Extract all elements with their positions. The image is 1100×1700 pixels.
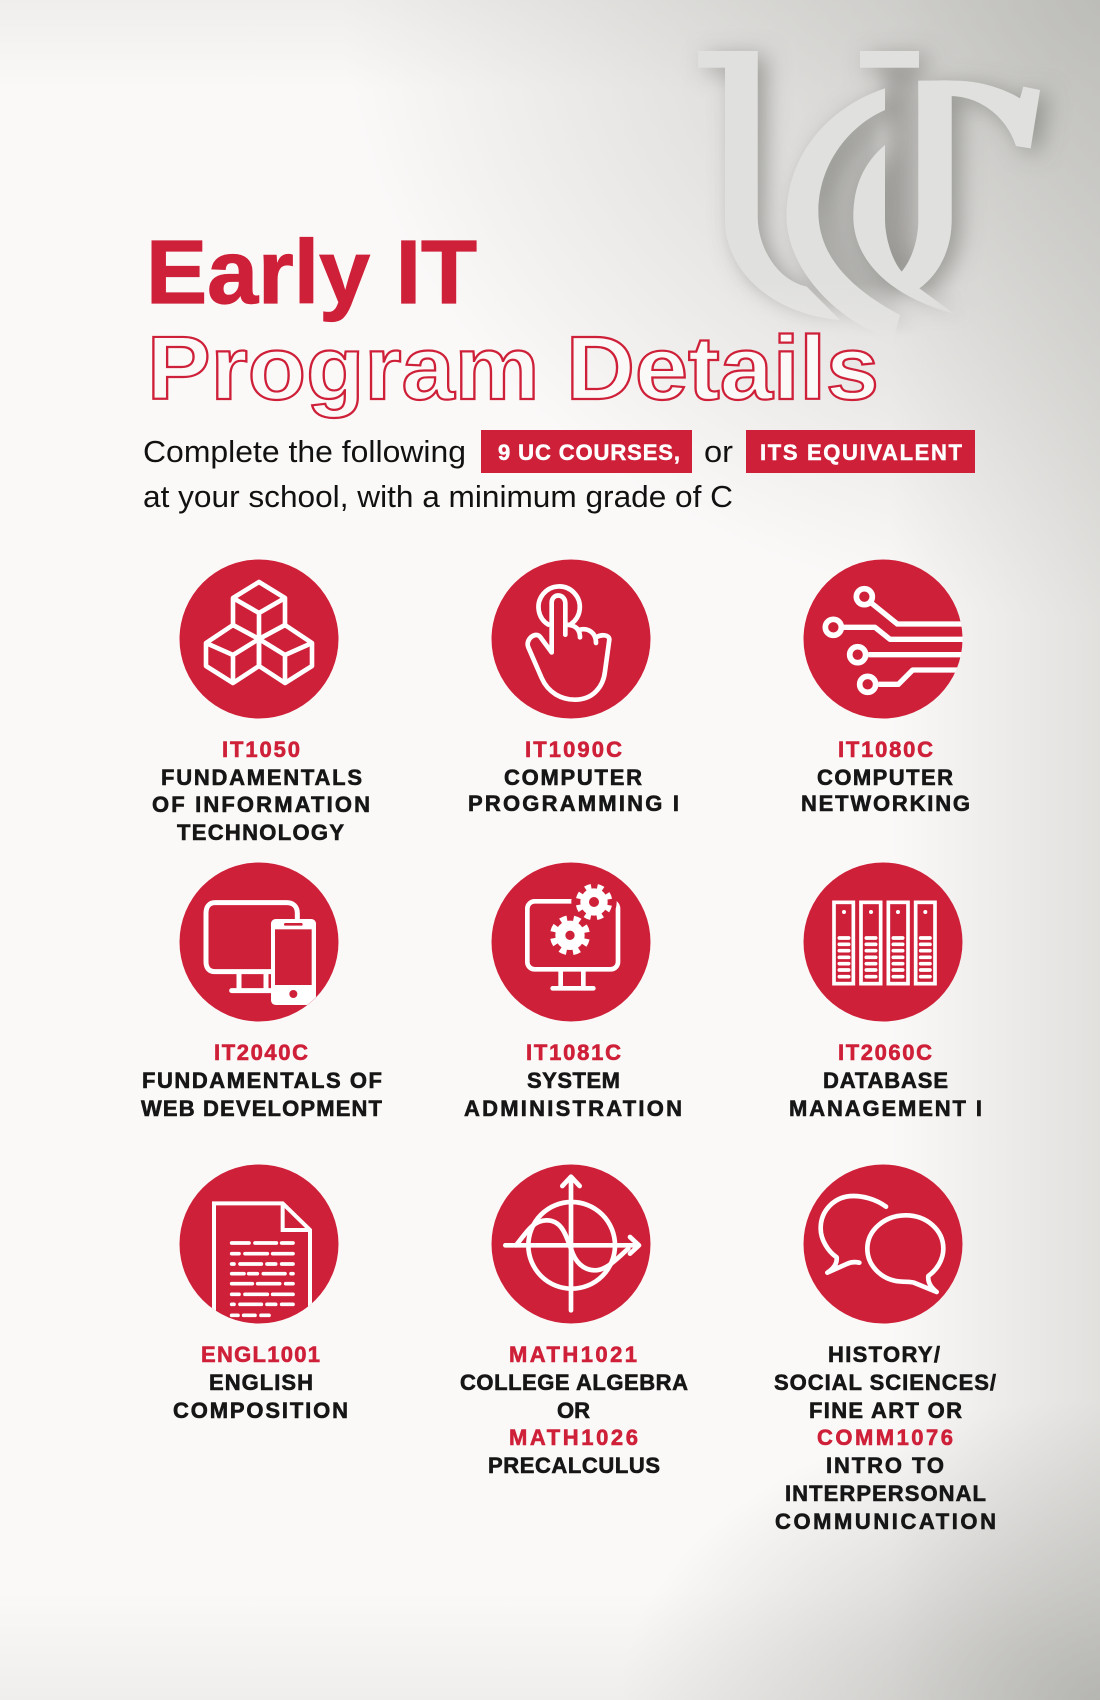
intro text block with badges: at your school, with a minimum grade of C [143,479,733,514]
course label: TECHNOLOGY [177,820,344,845]
course label: FUNDAMENTALS OF [142,1068,382,1093]
course label: NETWORKING [801,791,970,816]
course label: COMM1076 [817,1425,953,1450]
course label: PROGRAMMING I [468,791,679,816]
course label: SYSTEM [527,1068,620,1093]
course: MATH1021 / MATH1026 [460,1164,688,1478]
course label: COMMUNICATION [775,1509,996,1534]
course label [789,1040,982,1121]
badge: 9 UC courses [481,430,692,473]
course label: ADMINISTRATION [464,1096,682,1121]
badge: its equivalent [746,430,975,473]
course label: MANAGEMENT I [789,1096,982,1121]
logo: embossed UC monogram [698,51,1040,340]
course label: INTERPERSONAL [785,1481,986,1506]
course label [141,1040,383,1121]
icon: monitor with gears [492,862,650,1022]
course label: IT1080C [838,737,933,762]
course label: FUNDAMENTALS [161,765,362,790]
intro text block with badges [143,430,975,514]
course: ENGL1001 [173,1164,348,1423]
icon: document [180,1164,338,1324]
icon: graph with sine wave [492,1164,650,1324]
course label: IT1050 [222,737,300,762]
course: IT1080C [801,560,970,816]
course label [152,737,370,845]
badge: its equivalent: ITS EQUIVALENT [760,440,963,465]
course label: SOCIAL SCIENCES/ [774,1370,996,1395]
icon: speech bubbles [804,1164,962,1324]
title: Early IT: Early IT [146,223,477,323]
course label: COLLEGE ALGEBRA [460,1370,688,1395]
course label: OF INFORMATION [152,792,370,817]
course label: IT1090C [525,737,622,762]
icon: monitor and phone [180,862,338,1022]
intro text block with badges: Complete the following [143,434,466,469]
course: IT2040C [141,862,383,1121]
icon: hand tapping [492,560,650,718]
course label: ENGL1001 [201,1342,320,1367]
course label: MATH1021 [509,1342,637,1367]
course label: IT1081C [526,1040,621,1065]
course label: COMPUTER [817,765,953,790]
course label [464,1040,682,1121]
course label: IT2040C [214,1040,308,1065]
course label: WEB DEVELOPMENT [141,1096,383,1121]
course: electives and COMM1076 [774,1164,996,1534]
course label: COMPUTER [504,765,642,790]
course: IT1050 [152,560,370,845]
course: IT2060C [789,862,982,1121]
course: IT1090C [468,560,679,816]
course label [460,1342,688,1478]
course label [801,737,970,816]
title: Program Details (outlined): Program Details [147,319,879,419]
icon: circuit [804,560,965,718]
course label: COMPOSITION [173,1398,348,1423]
course label: HISTORY/ [828,1342,940,1367]
course label: FINE ART OR [809,1398,962,1423]
course label: DATABASE [823,1068,948,1093]
course label: IT2060C [838,1040,932,1065]
course label: INTRO TO [826,1453,944,1478]
intro text block with badges: or [704,434,733,469]
icon: server racks [804,862,962,1022]
course label [468,737,679,816]
course label [173,1342,348,1423]
badge: 9 UC courses: 9 UC COURSES, [498,440,680,465]
course label [774,1342,996,1534]
course label: OR [557,1398,590,1423]
course label: ENGLISH [209,1370,313,1395]
course: IT1081C [464,862,682,1121]
icon: cubes [180,560,338,718]
course label: PRECALCULUS [488,1453,660,1478]
course label: MATH1026 [509,1425,638,1450]
